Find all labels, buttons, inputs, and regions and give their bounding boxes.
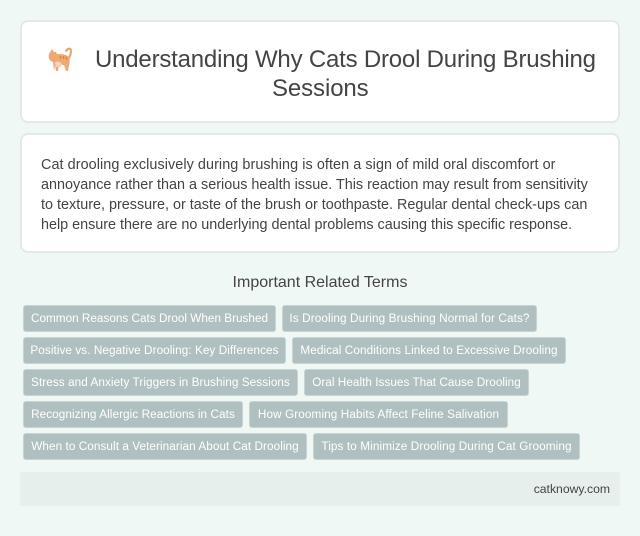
tag [23, 369, 298, 396]
panel: title card [20, 20, 620, 123]
tag: When to Consult a Veterinarian About Cat Drooling [31, 440, 299, 453]
tag [23, 305, 276, 332]
tag [292, 337, 566, 364]
heading [95, 46, 596, 102]
panel: description [20, 133, 620, 253]
tag [282, 305, 537, 332]
tag: Positive vs. Negative Drooling: Key Differences [30, 344, 279, 357]
tag: Is Drooling During Brushing Normal for Cats? [289, 312, 530, 325]
tag: Common Reasons Cats Drool When Brushed [31, 312, 268, 325]
tag: Recognizing Allergic Reactions in Cats [31, 408, 235, 421]
text block: help ensure there are no underlying dental problems causing this specific response. [41, 217, 572, 233]
text block [41, 157, 588, 233]
tag list [23, 305, 580, 460]
tag [23, 337, 286, 364]
text block: to texture, pressure, or taste of the brush or toothpaste. Regular dental check-ups can [41, 197, 587, 213]
footer bar [20, 472, 620, 506]
icon: cat [48, 48, 72, 71]
heading: Sessions [272, 75, 369, 102]
text block: annoyance rather than a serious health issue. This reaction may result from sensitivity [41, 177, 588, 193]
footer text: catknowy.com [534, 482, 610, 496]
tag [249, 401, 508, 428]
tag: Stress and Anxiety Triggers in Brushing Sessions [31, 376, 290, 389]
text block: Cat drooling exclusively during brushing is often a sign of mild oral discomfort or [41, 157, 556, 173]
heading: related terms: Important Related Terms [233, 274, 407, 291]
heading: Understanding Why Cats Drool During Brushing [95, 46, 596, 73]
tag: Oral Health Issues That Cause Drooling [312, 376, 521, 389]
tag: Tips to Minimize Drooling During Cat Grooming [321, 440, 572, 453]
tag: Medical Conditions Linked to Excessive Drooling [300, 344, 558, 357]
tag [23, 401, 243, 428]
tag [23, 433, 307, 460]
tag [304, 369, 529, 396]
tag [313, 433, 580, 460]
tag: How Grooming Habits Affect Feline Salivation [258, 408, 499, 421]
